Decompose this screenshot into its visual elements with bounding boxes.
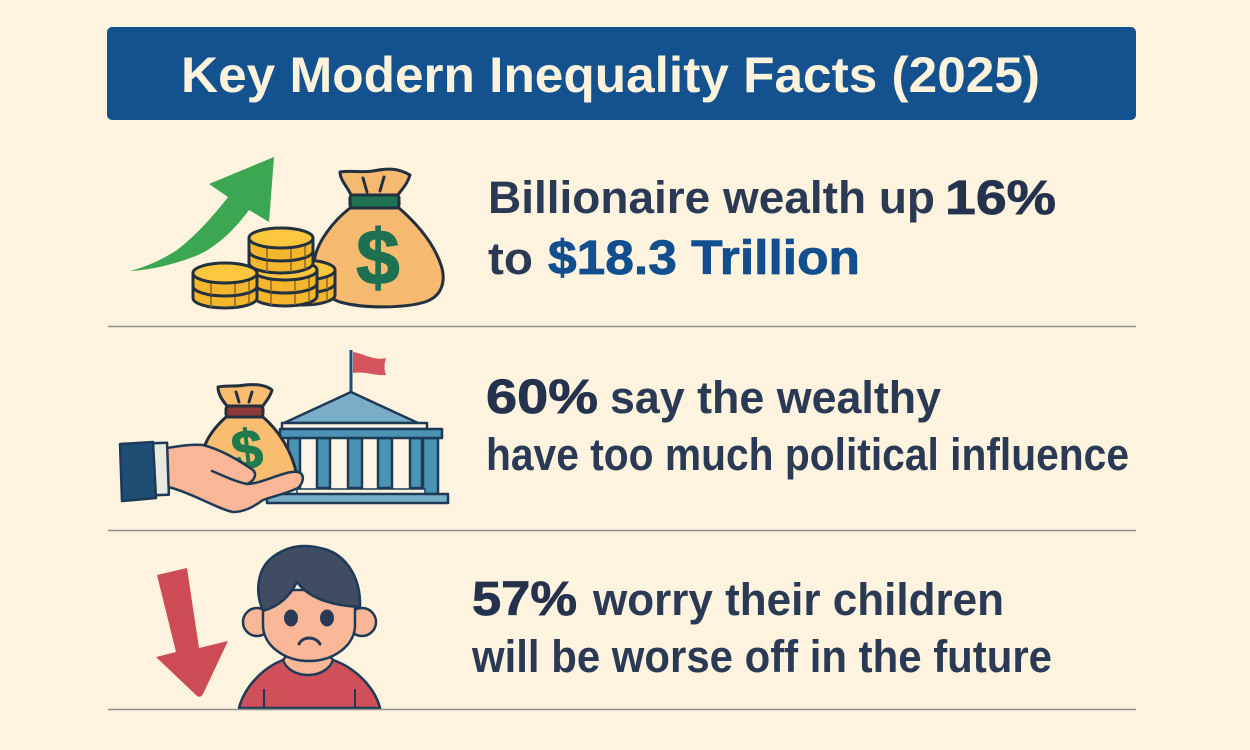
- panel: political influence: [120, 350, 1129, 512]
- text: billionaire wealth: [488, 172, 1056, 285]
- panel: billionaire wealth: [130, 157, 1056, 308]
- text: political influence: [486, 371, 1129, 480]
- icon: green rising arrow: [130, 157, 274, 271]
- text: billionaire wealth: 16%: [945, 172, 1056, 225]
- icon: money bag and coins: $: [356, 213, 400, 301]
- text: children's future: 57%: [472, 573, 577, 626]
- panel: children's future: [156, 546, 1052, 708]
- text: billionaire wealth: $18.3 Trillion: [548, 232, 860, 285]
- title banner: Key Modern Inequality Facts (2025): [181, 47, 1040, 103]
- icon: hand and cuff: [120, 442, 303, 512]
- text: children's future: worry their children: [592, 574, 1004, 625]
- icon: money bag: $: [228, 417, 266, 482]
- text: children's future: [471, 573, 1052, 682]
- icon: government building with flag: [267, 350, 448, 503]
- text: billionaire wealth: to: [488, 233, 533, 284]
- text: billionaire wealth: Billionaire wealth up: [488, 172, 935, 223]
- text: political influence: have too much political influence: [486, 429, 1129, 480]
- text: political influence: 60%: [486, 371, 598, 424]
- icon: worried child: [239, 546, 380, 708]
- icon: money bag: [204, 385, 297, 494]
- icon: money bag and coins: [193, 169, 443, 308]
- title banner: [107, 27, 1136, 120]
- icon: red down arrow: [156, 568, 228, 697]
- text: political influence: say the wealthy: [610, 372, 941, 423]
- text: children's future: will be worse off in the future: [471, 631, 1052, 682]
